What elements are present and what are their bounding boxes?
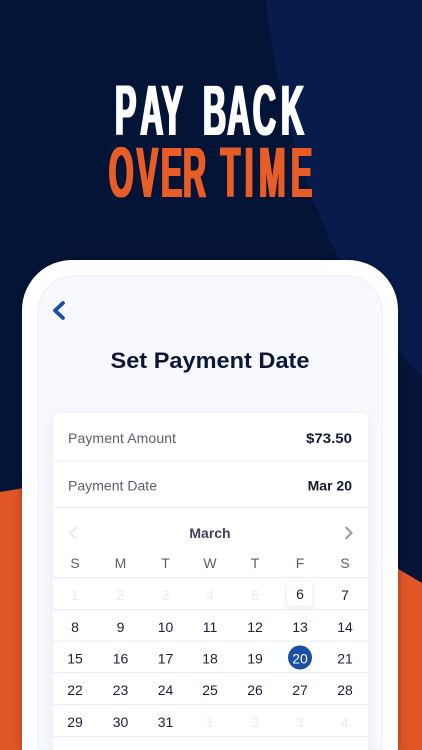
- week row 3: 17: [158, 650, 173, 666]
- week row 2: 8: [71, 619, 79, 635]
- weekday labels: M: [115, 555, 126, 571]
- week row 4: 27: [292, 682, 308, 698]
- week row 4: 24: [158, 682, 173, 698]
- weekday labels: S: [70, 555, 80, 571]
- week row 4: 28: [337, 682, 353, 698]
- week row 1: 3: [162, 587, 170, 603]
- selected date: 20: [288, 646, 312, 670]
- week row 2: 12: [247, 619, 263, 635]
- calendar month header: March: [189, 525, 231, 541]
- panel: payment card: [53, 413, 368, 750]
- week row 5: 2: [251, 714, 259, 730]
- selected date: 20: 20: [292, 650, 308, 666]
- weekday labels: F: [296, 555, 304, 571]
- title line: over time: OVER TIME: [109, 133, 312, 212]
- payment amount row: Payment Amount: [68, 430, 176, 446]
- weekday labels: T: [251, 555, 260, 571]
- payment amount row: [68, 430, 352, 446]
- payment date row: Payment Date: [68, 478, 157, 494]
- payment amount row: $73.50: [306, 430, 352, 446]
- today tile: 6: 6: [296, 586, 304, 602]
- week row 3: 18: [202, 650, 218, 666]
- payment date row: [68, 478, 352, 494]
- background: orange left shape: [0, 487, 30, 750]
- week row 5: 3: [296, 714, 304, 730]
- phone screen: [38, 276, 382, 750]
- week row 2: 9: [117, 619, 125, 635]
- week row 2: 10: [158, 619, 173, 635]
- week row 3: 16: [113, 650, 128, 666]
- week row 1: 2: [117, 587, 125, 603]
- weekday labels: S: [340, 555, 350, 571]
- week row 2: 11: [203, 619, 217, 635]
- week row 1: 5: [251, 587, 259, 603]
- week row 4: 26: [247, 682, 263, 698]
- week row 4: 22: [67, 682, 83, 698]
- week row 3: [67, 646, 353, 670]
- week row 2: 14: [337, 619, 353, 635]
- week row 3: 15: [67, 650, 83, 666]
- screen heading: Set Payment Date: [110, 348, 310, 373]
- week row 5: 31: [158, 714, 173, 730]
- weekday labels: T: [161, 555, 170, 571]
- payment date row: Mar 20: [308, 478, 352, 494]
- today tile: 6: [287, 582, 312, 606]
- background: orange right shape: [390, 564, 422, 750]
- week row 5: 30: [113, 714, 128, 730]
- title line: pay back: PAY BACK: [115, 71, 304, 150]
- background: blue curved shape: [266, 0, 422, 377]
- calendar month header: [70, 525, 352, 541]
- week row 5: 29: [67, 714, 83, 730]
- weekday labels: [70, 555, 350, 571]
- week row 1: 1: [71, 587, 79, 603]
- week row 2: 13: [292, 619, 308, 635]
- week row 5: 4: [341, 714, 349, 730]
- week row 4: 23: [113, 682, 128, 698]
- weekday labels: W: [203, 555, 217, 571]
- week row 1: 4: [206, 587, 214, 603]
- title: [109, 71, 312, 212]
- week row 3: 19: [247, 650, 263, 666]
- week row 3: 21: [337, 650, 353, 666]
- phone frame: [22, 260, 398, 750]
- week row 5: [67, 714, 349, 730]
- week row 1: 7: [341, 587, 349, 603]
- week row 2: [71, 619, 353, 635]
- week row 4: 25: [202, 682, 218, 698]
- week row 5: 1: [206, 714, 214, 730]
- week row 1: [71, 582, 349, 606]
- icon: back chevron: [55, 303, 63, 318]
- week row 4: [67, 682, 353, 698]
- calendar: [53, 525, 368, 736]
